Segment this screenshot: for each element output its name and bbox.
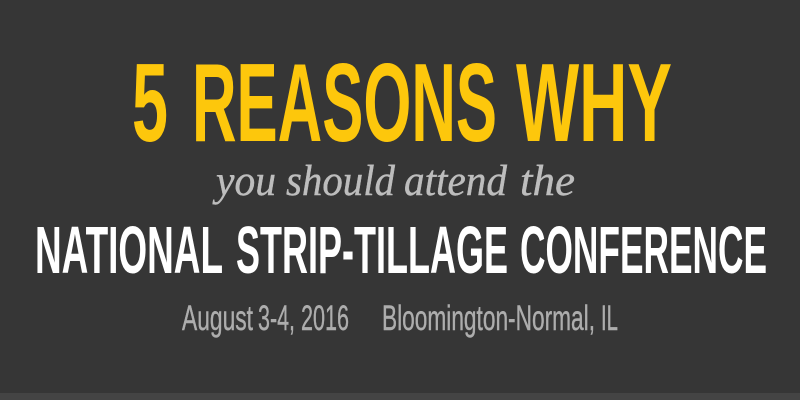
- subtitle: you should attend the: the: [520, 158, 575, 205]
- event location: IL: [601, 299, 618, 338]
- event date: 3-4,: [258, 299, 295, 338]
- subtitle: you should attend the: you: [212, 158, 276, 205]
- bottom strip: [0, 393, 800, 400]
- subtitle: you should attend the: attend: [404, 158, 507, 205]
- event date: August: [182, 299, 253, 338]
- subtitle: you should attend the: should: [286, 158, 395, 205]
- conference name: STRIP-TILLAGE: [236, 213, 508, 288]
- subtitle: you should attend the: [212, 158, 575, 205]
- conference name: [35, 213, 767, 288]
- event location: Bloomington-Normal,: [382, 299, 595, 338]
- title: 5 reasons why: 5: [132, 41, 168, 165]
- event date: 2016: [301, 299, 349, 338]
- title: 5 reasons why: WHY: [516, 41, 672, 165]
- event date: [182, 299, 349, 338]
- title: 5 reasons why: REASONS: [192, 41, 497, 165]
- conference name: NATIONAL: [35, 213, 223, 288]
